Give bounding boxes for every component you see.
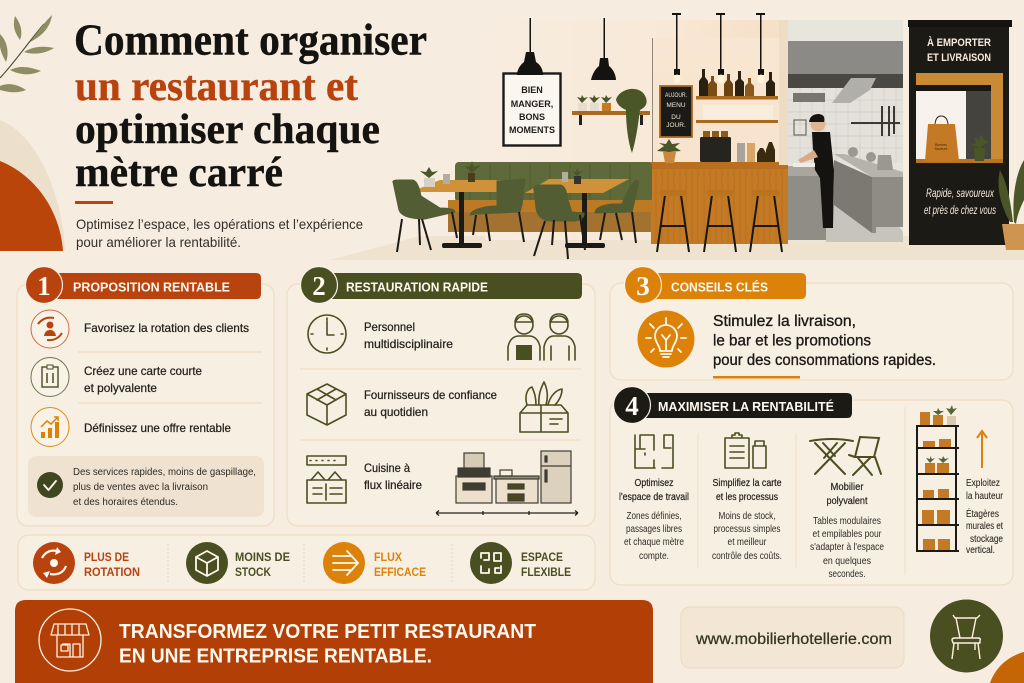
key advice text xyxy=(713,313,936,369)
pendant lamps xyxy=(517,13,765,84)
title: optimiser chaque xyxy=(75,107,380,153)
panel 2 header: 2 xyxy=(312,271,326,301)
panel 1 header xyxy=(26,266,261,304)
panel 4 header xyxy=(614,386,852,424)
icon: kitchen equipment xyxy=(456,451,571,503)
panel 4 header: 4 xyxy=(625,391,639,421)
poster: MOMENTS xyxy=(509,125,555,135)
tables xyxy=(411,179,629,248)
icon: kitchen plan xyxy=(307,456,346,503)
column: mobilier: s'adapter à l'espace xyxy=(810,542,884,553)
column: simplifiez: contrôle des coûts. xyxy=(712,551,782,562)
tiled wall xyxy=(788,88,903,163)
bench xyxy=(448,162,652,232)
benefits strip xyxy=(18,535,595,590)
benefit: flux xyxy=(323,542,426,584)
bottle shelves xyxy=(696,69,778,123)
column: hauteur: murales et xyxy=(966,521,1003,532)
column: espace de travail: Zones définies, xyxy=(626,511,682,522)
item: cuisine: Cuisine à xyxy=(364,461,410,475)
hero illustration: restaurant interior xyxy=(330,13,1024,260)
item: carte courte: Créez une carte courte xyxy=(84,364,202,378)
column: simplifiez: et les processus xyxy=(716,492,778,503)
item: cuisine: flux linéaire xyxy=(364,478,422,492)
banner text: TRANSFORMEZ VOTRE PETIT RESTAURANT xyxy=(119,620,536,643)
chairs xyxy=(393,179,639,259)
item: carte courte xyxy=(31,358,202,396)
subtitle xyxy=(76,216,363,250)
divider xyxy=(300,439,581,441)
logo: chair xyxy=(930,600,1003,672)
panel 3 header: 3 xyxy=(636,271,650,301)
column: mobilier: et empilables pour xyxy=(812,529,882,540)
panel 4: maximiser la rentabilite xyxy=(610,386,1013,585)
icon: check xyxy=(37,472,63,498)
website box xyxy=(681,607,904,668)
wall xyxy=(485,20,790,240)
call to action banner xyxy=(15,600,653,683)
callout: Des services rapides, moins de gaspillage, xyxy=(73,467,256,478)
arrow: upward xyxy=(977,431,987,468)
column: mobilier xyxy=(810,437,884,580)
panel 2 header: RESTAURATION RAPIDE xyxy=(346,280,488,294)
window plant xyxy=(971,134,990,161)
divider xyxy=(78,402,262,404)
paper bag: Bonnes xyxy=(935,143,947,147)
benefit: flux: FLUX xyxy=(374,550,402,564)
panel 3 header: CONSEILS CLÉS xyxy=(671,280,768,294)
benefit: rotation: PLUS DE xyxy=(84,550,129,564)
item: cuisine xyxy=(307,451,578,516)
arrows: linear flow xyxy=(436,510,578,516)
benefit: rotation: ROTATION xyxy=(84,565,140,579)
divider xyxy=(78,351,262,353)
item: offre rentable xyxy=(31,408,231,446)
column: espace de travail: et chaque mètre xyxy=(624,537,684,548)
decoration: left semicircles xyxy=(0,120,65,251)
chef xyxy=(793,114,834,228)
title underline xyxy=(75,201,113,204)
column: mobilier: Tables modulaires xyxy=(813,516,881,527)
subtitle: pour améliorer la rentabilité. xyxy=(76,234,241,250)
column: simplifiez: et meilleur xyxy=(728,537,767,548)
benefit: espace xyxy=(470,542,571,584)
panel 2: restauration rapide xyxy=(287,266,595,526)
poster: MANGER, xyxy=(511,99,553,109)
chalkboard menu xyxy=(660,86,692,137)
column: simplifiez xyxy=(712,433,782,562)
panel 1 header: PROPOSITION RENTABLE xyxy=(73,280,230,294)
column: hauteur: stockage xyxy=(970,534,1003,545)
column: espace de travail: passages libres xyxy=(626,524,682,535)
icon: floor plan xyxy=(635,435,673,468)
benefit: espace: FLEXIBLE xyxy=(521,565,571,579)
kitchen xyxy=(788,20,903,242)
pots and utensils xyxy=(848,147,858,157)
decoration: olive branch xyxy=(0,15,54,92)
takeaway window xyxy=(916,73,1003,163)
wall: bar zone xyxy=(653,38,779,163)
icon: storage shelves xyxy=(916,405,959,552)
corner plant xyxy=(998,160,1024,250)
icon: clipboard xyxy=(725,433,766,468)
item: fournisseurs: au quotidien xyxy=(364,405,428,419)
takeaway tagline: Rapide, savoureux xyxy=(926,186,995,200)
column: simplifiez: Moins de stock, xyxy=(718,511,776,522)
left shelf with plants xyxy=(572,95,650,125)
column: espace de travail: Optimisez xyxy=(634,478,674,489)
column: hauteur: Étagères xyxy=(966,507,999,520)
item: personnel: Personnel xyxy=(364,320,415,334)
divider xyxy=(300,368,581,370)
benefit: stock: STOCK xyxy=(235,565,271,579)
column: hauteur: vertical. xyxy=(966,545,995,556)
poster xyxy=(504,74,560,146)
column: hauteur: la hauteur xyxy=(966,491,1004,502)
panel 2 header xyxy=(300,266,582,304)
panel 3 header xyxy=(624,266,806,304)
benefit: stock xyxy=(186,542,290,584)
key advice text: pour des consommations rapides. xyxy=(713,352,936,369)
icon: box xyxy=(307,384,346,425)
item: fournisseurs: Fournisseurs de confiance xyxy=(364,388,497,402)
item: personnel xyxy=(308,314,575,360)
floor xyxy=(330,236,1024,260)
item: carte courte: et polyvalente xyxy=(84,381,157,395)
column: simplifiez: Simplifiez la carte xyxy=(712,478,782,489)
takeaway panel xyxy=(908,20,1012,245)
column: espace de travail: compte. xyxy=(639,551,669,562)
panel 1: proposition rentable xyxy=(17,266,274,526)
item: rotation: Favorisez la rotation des clients xyxy=(84,321,249,335)
chalkboard menu: AUJOUR. xyxy=(665,92,687,99)
key advice text: Stimulez la livraison, xyxy=(713,313,856,330)
corner orange shape xyxy=(990,652,1024,683)
coffee machine and bar items xyxy=(700,131,775,162)
left counter xyxy=(788,175,826,240)
column: hauteur: Exploitez xyxy=(966,478,1000,489)
title: Comment organiser xyxy=(74,16,427,64)
panel 4 header: MAXIMISER LA RENTABILITÉ xyxy=(658,399,834,414)
underline xyxy=(713,376,800,378)
website box: www.mobilierhotellerie.com xyxy=(695,631,892,648)
bar plant xyxy=(657,139,681,163)
column: mobilier: en quelques xyxy=(823,556,871,567)
column: espace de travail xyxy=(619,435,689,562)
subtitle: Optimisez l’espace, les opérations et l’expérience xyxy=(76,216,363,232)
item: fournisseurs xyxy=(307,382,568,432)
callout xyxy=(28,456,264,517)
takeaway heading xyxy=(927,36,991,64)
column: hauteur xyxy=(916,405,1004,556)
bar stools xyxy=(657,190,782,252)
item: offre rentable: Définissez une offre rentable xyxy=(84,421,231,435)
icon: light bulb xyxy=(638,310,694,368)
chalkboard menu: DU xyxy=(671,114,681,121)
title: mètre carré xyxy=(75,150,283,196)
hanging plant xyxy=(616,89,647,153)
takeaway heading: ET LIVRAISON xyxy=(927,52,991,64)
icon: folding table and chair xyxy=(810,437,881,475)
banner text xyxy=(119,620,536,668)
right counter xyxy=(834,160,872,233)
callout: plus de ventes avec la livraison xyxy=(73,482,208,493)
paper bag: Saveurs xyxy=(935,147,948,151)
panel 3: conseils cles xyxy=(610,266,1013,380)
title xyxy=(74,16,427,196)
column: espace de travail: l'espace de travail xyxy=(619,492,689,503)
column: mobilier: secondes. xyxy=(828,569,866,580)
takeaway heading: À EMPORTER xyxy=(927,36,991,49)
item: rotation xyxy=(31,310,249,348)
panel 1 header: 1 xyxy=(37,271,51,301)
chalkboard menu: JOUR. xyxy=(666,122,686,129)
item: personnel: multidisciplinaire xyxy=(364,337,453,351)
icon: staff xyxy=(508,314,575,360)
title: un restaurant et xyxy=(75,64,358,110)
table plants and shakers xyxy=(420,161,583,187)
banner text: EN UNE ENTREPRISE RENTABLE. xyxy=(119,644,432,668)
paper bag xyxy=(925,116,959,161)
icon: shop xyxy=(39,609,101,671)
icon: clock xyxy=(308,315,346,353)
takeaway tagline xyxy=(924,186,996,217)
kitchen floor xyxy=(826,190,903,242)
benefit: espace: ESPACE xyxy=(521,550,563,564)
poster: BONS xyxy=(519,112,545,122)
poster: BIEN xyxy=(521,85,543,95)
column: simplifiez: processus simples xyxy=(714,524,780,535)
callout: et des horaires étendus. xyxy=(73,497,178,508)
bar counter xyxy=(648,162,790,244)
chalkboard menu: MENU xyxy=(666,102,686,109)
column xyxy=(779,20,788,165)
column: mobilier: polyvalent xyxy=(826,496,868,507)
benefit: flux: EFFICACE xyxy=(374,565,426,579)
benefit: rotation xyxy=(33,542,140,584)
icon: vegetable crate xyxy=(520,382,568,432)
benefit: stock: MOINS DE xyxy=(235,550,290,564)
key advice text: le bar et les promotions xyxy=(713,332,871,350)
column: mobilier: Mobilier xyxy=(830,482,864,493)
